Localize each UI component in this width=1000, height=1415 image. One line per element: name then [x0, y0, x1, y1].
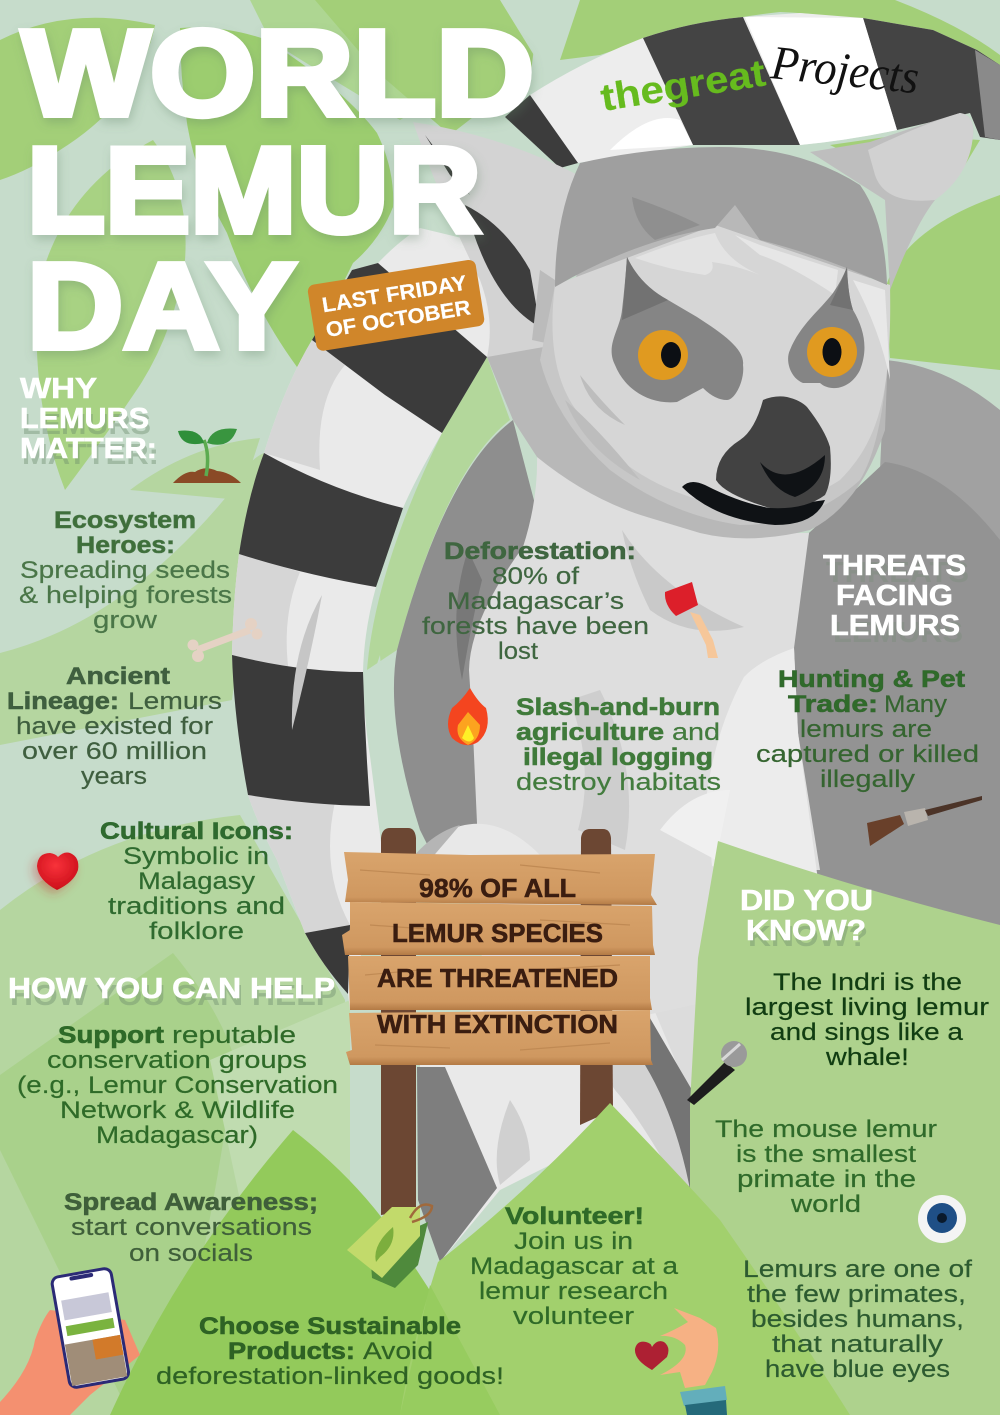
text: deforestation — [422, 538, 649, 665]
icon: flame — [448, 688, 488, 745]
heading: how you can help: HOW YOU CAN HELP — [8, 973, 335, 1005]
text: volunteer: volunteer — [513, 1303, 634, 1330]
text: deforestation: forests have been — [422, 613, 649, 640]
text: sustainable products: Products: — [228, 1338, 355, 1365]
icon: axe — [665, 582, 718, 658]
text: mouse lemur fact: is the smallest — [736, 1141, 916, 1168]
text: mouse lemur fact: The mouse lemur — [715, 1116, 937, 1143]
nose — [716, 396, 831, 508]
sign text: extinction statistic: ARE THREATENED — [377, 963, 618, 993]
text: mouse lemur fact — [715, 1116, 937, 1218]
text: ecosystem heroes: Spreading seeds — [20, 557, 230, 584]
text: cultural icons: folklore — [149, 918, 244, 945]
icon: blue eye — [918, 1195, 966, 1243]
heading: threats facing lemurs: THREATS — [826, 557, 969, 589]
text: spread awareness — [64, 1189, 318, 1267]
text: sustainable products: Avoid — [363, 1338, 433, 1365]
text: spread awareness: start conversations — [71, 1214, 312, 1241]
lemur body — [394, 360, 1000, 1262]
text: ancient lineage — [7, 663, 222, 790]
mouth — [682, 482, 825, 525]
text: volunteer: lemur research — [479, 1278, 668, 1305]
text: cultural icons: Cultural Icons: — [100, 818, 293, 845]
text: deforestation: Deforestation: — [444, 538, 636, 565]
sign boards — [342, 852, 657, 1065]
text: ancient lineage: over 60 million — [22, 738, 207, 765]
text: slash and burn: illegal logging — [523, 744, 713, 771]
sign text: extinction statistic: 98% OF ALL — [419, 873, 576, 903]
logo — [598, 36, 922, 120]
text: slash and burn: agriculture — [516, 719, 664, 746]
date badge: LAST FRIDAY — [320, 272, 468, 317]
text: blue eyes fact: have blue eyes — [765, 1356, 950, 1383]
text: support conservation groups: Madagascar) — [96, 1122, 258, 1149]
heading: why lemurs matter: LEMURS — [22, 409, 151, 441]
title: LEMUR — [27, 122, 481, 258]
text: blue eyes fact — [743, 1256, 972, 1383]
heading: did you know — [740, 885, 873, 953]
text: ancient lineage: Ancient — [66, 663, 170, 690]
sign posts — [381, 828, 613, 1215]
text: volunteer: Volunteer! — [505, 1203, 644, 1230]
text: volunteer — [470, 1203, 679, 1330]
text: indri fact: and sings like a — [770, 1019, 964, 1046]
text: hunting and pet trade: illegally — [820, 766, 915, 793]
text: ancient lineage: have existed for — [16, 713, 213, 740]
text: deforestation: lost — [498, 638, 538, 665]
text: sustainable products: Choose Sustainable — [199, 1313, 461, 1340]
text: indri fact — [745, 969, 989, 1071]
lemur tail — [232, 13, 1000, 1010]
text: volunteer: Madagascar at a — [470, 1253, 679, 1280]
date badge: OF OCTOBER — [324, 296, 472, 342]
heading: threats facing lemurs: LEMURS — [830, 610, 960, 642]
text: hunting and pet trade: Hunting & Pet — [778, 666, 965, 693]
nose crease — [760, 455, 825, 497]
icon: bone — [188, 618, 262, 662]
text: support conservation groups: conservation groups — [47, 1047, 307, 1074]
text: ecosystem heroes — [19, 507, 232, 634]
text: blue eyes fact: that naturally — [772, 1331, 943, 1358]
text: slash and burn: and — [672, 719, 720, 746]
logo: thegreat — [598, 52, 769, 120]
icon: seedling — [173, 429, 241, 483]
text: support conservation groups: Network & Wildlife — [60, 1097, 295, 1124]
sign text: extinction statistic — [377, 873, 618, 1039]
foreground leaves — [110, 841, 1000, 1415]
icon: eco tag — [347, 1204, 432, 1288]
text: support conservation groups: (e.g., Lemur Conservation — [17, 1072, 338, 1099]
sign text: extinction statistic: LEMUR SPECIES — [392, 918, 603, 948]
text: spread awareness: on socials — [129, 1240, 253, 1267]
left eye — [638, 330, 688, 380]
heading: why lemurs matter: MATTER: — [20, 433, 157, 465]
icon: rifle — [867, 796, 982, 846]
text: hunting and pet trade: Trade: — [788, 691, 878, 718]
text: hunting and pet trade: lemurs are — [800, 716, 932, 743]
text: sustainable products — [156, 1313, 504, 1390]
icon: red heart — [37, 852, 78, 890]
text: indri fact: The Indri is the — [773, 969, 962, 996]
heading: threats facing lemurs — [823, 550, 969, 649]
heading: why lemurs matter: MATTER: — [22, 439, 159, 471]
left eye mask — [612, 257, 743, 402]
text: indri fact: largest living lemur — [745, 994, 989, 1021]
sign text: extinction statistic: WITH EXTINCTION — [377, 1009, 618, 1039]
text: ecosystem heroes: grow — [93, 607, 158, 634]
icon: microphone — [687, 1041, 747, 1105]
text: support conservation groups: Support — [58, 1022, 164, 1049]
text: ecosystem heroes: & helping forests — [19, 582, 232, 609]
heading: why lemurs matter: LEMURS — [20, 403, 149, 435]
text: ecosystem heroes: Heroes: — [76, 532, 175, 559]
text: cultural icons: traditions and — [108, 893, 285, 920]
heading: how you can help: HOW YOU CAN HELP — [10, 980, 337, 1012]
logo: Projects — [768, 36, 922, 104]
right eye mask — [788, 267, 864, 388]
text: support conservation groups — [17, 1022, 338, 1149]
text: slash and burn — [516, 694, 721, 796]
text: cultural icons — [100, 818, 293, 945]
text: blue eyes fact: Lemurs are one of — [743, 1256, 972, 1283]
lemur head — [487, 147, 890, 538]
date badge — [307, 259, 485, 352]
text: mouse lemur fact: world — [790, 1191, 861, 1218]
text: blue eyes fact: besides humans, — [751, 1306, 964, 1333]
lemur ears — [413, 113, 973, 357]
text: cultural icons: Symbolic in — [123, 843, 269, 870]
right eye — [807, 327, 857, 377]
heading: why lemurs matter — [20, 373, 159, 471]
text: blue eyes fact: the few primates, — [747, 1281, 966, 1308]
heading: did you know: DID YOU — [740, 885, 873, 917]
text: sustainable products: deforestation-linked goods! — [156, 1363, 504, 1390]
heading: threats facing lemurs: FACING — [836, 580, 953, 612]
text: deforestation: Madagascar’s — [447, 588, 624, 615]
title: WORLD — [22, 5, 534, 141]
text: support conservation groups: reputable — [172, 1022, 296, 1049]
heading: did you know: KNOW? — [746, 915, 866, 947]
heading: threats facing lemurs: THREATS — [823, 550, 966, 582]
text: indri fact: whale! — [825, 1044, 909, 1071]
text: hunting and pet trade: captured or killed — [756, 741, 979, 768]
heading: did you know: KNOW? — [748, 921, 868, 953]
text: deforestation: 80% of — [492, 563, 579, 590]
text: ancient lineage: years — [81, 763, 147, 790]
heading: why lemurs matter: WHY — [20, 373, 97, 405]
title: DAY — [27, 238, 296, 374]
icon: phone in hand — [0, 1268, 140, 1415]
text: slash and burn: destroy habitats — [516, 769, 721, 796]
title — [22, 5, 534, 374]
icon: hand holding heart — [635, 1308, 727, 1415]
text: hunting and pet trade: Many — [884, 691, 947, 718]
text: volunteer: Join us in — [514, 1228, 633, 1255]
text: slash and burn: Slash-and-burn — [516, 694, 720, 721]
text: hunting and pet trade — [756, 666, 979, 793]
text: ancient lineage: Lineage: — [7, 688, 119, 715]
text: cultural icons: Malagasy — [138, 868, 255, 895]
text: mouse lemur fact: primate in the — [737, 1166, 916, 1193]
text: spread awareness: Spread Awareness; — [64, 1189, 318, 1216]
text: ancient lineage: Lemurs — [128, 688, 222, 715]
text: ecosystem heroes: Ecosystem — [54, 507, 196, 534]
heading: threats facing lemurs: LEMURS — [833, 617, 963, 649]
